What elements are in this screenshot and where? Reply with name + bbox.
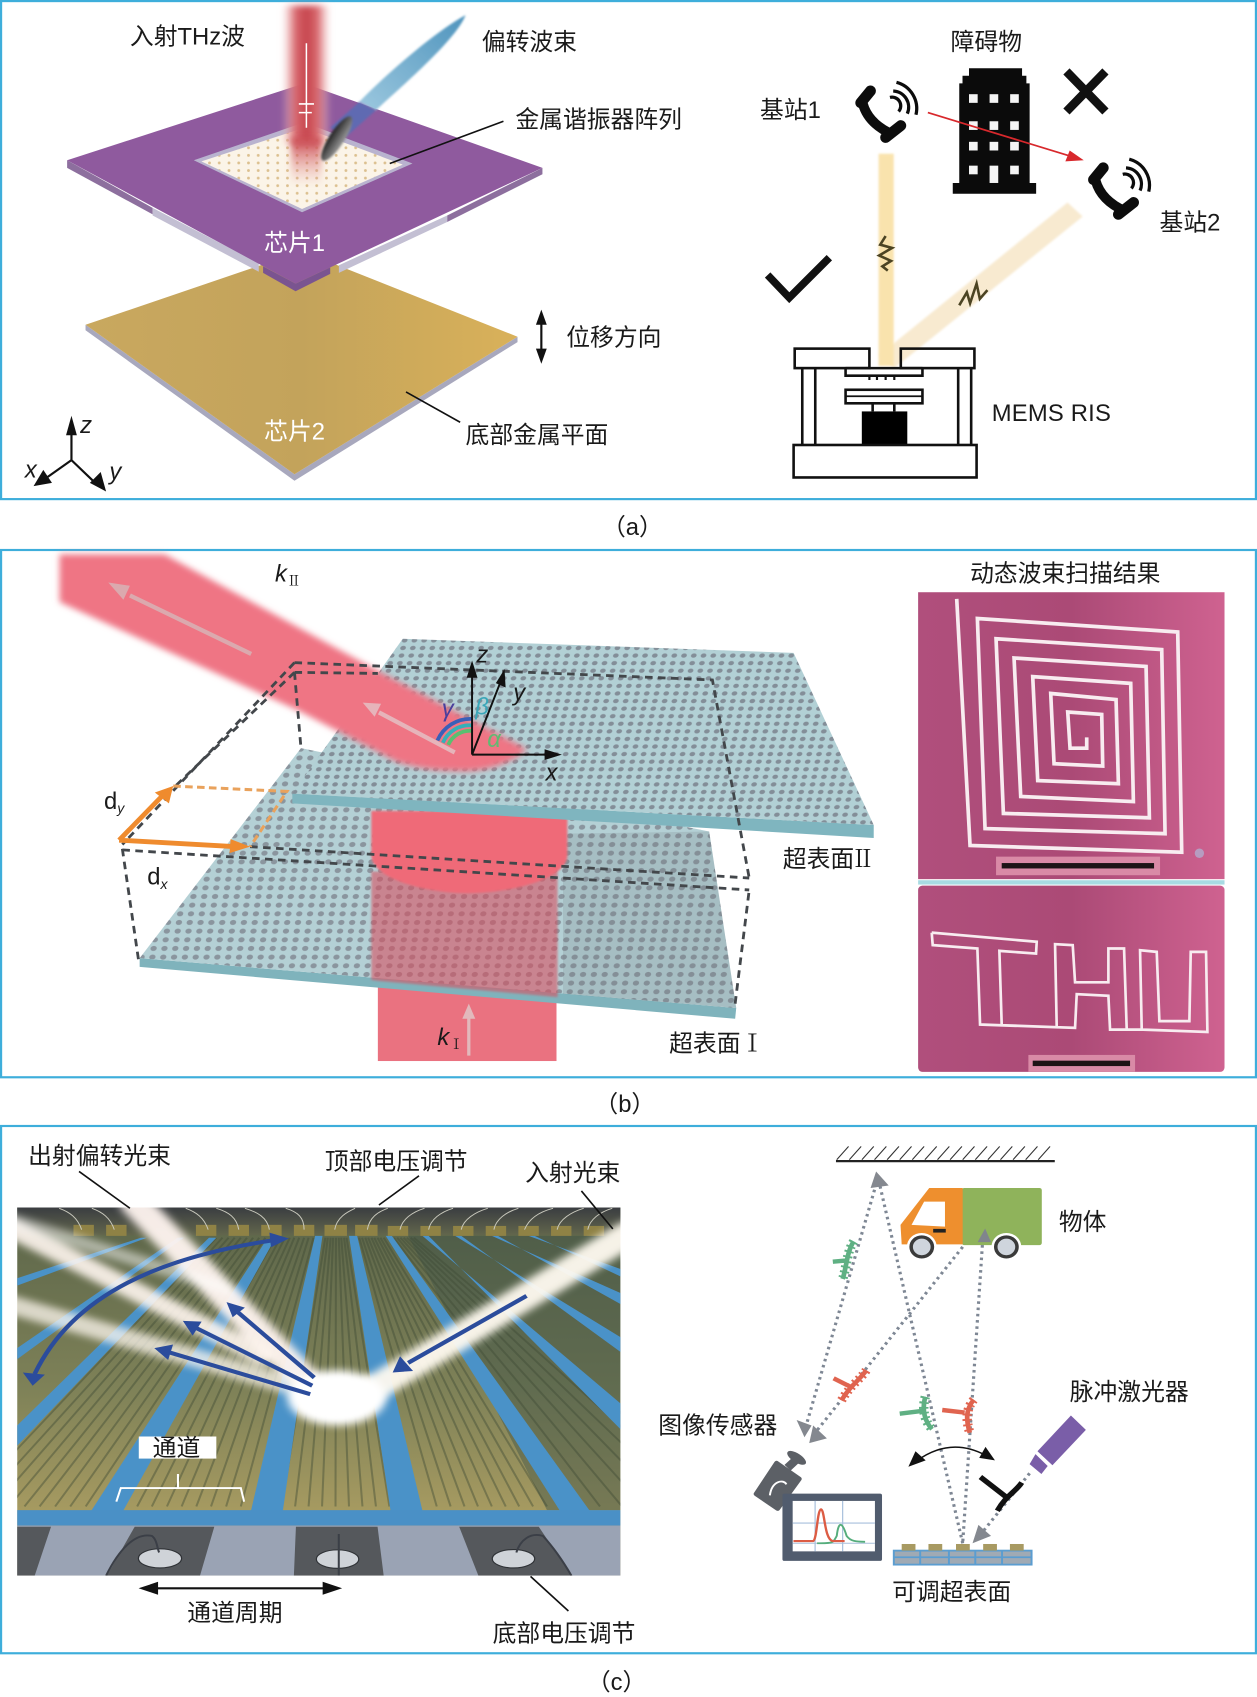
label: k I: Ⅰ <box>449 1037 463 1053</box>
orange displacement arrows dx dy: y <box>116 800 125 816</box>
panel (c): tunable metasurface beam steering <box>0 1126 1256 1653</box>
label: 脉冲激光器: 脉冲激光器 <box>1070 1379 1189 1406</box>
label: 超表面 II: Ⅱ <box>851 847 875 873</box>
incident red THz beam <box>284 5 329 186</box>
label: 基站2: 基站2 <box>1160 210 1220 237</box>
icon: tunable metasurface <box>894 1544 1032 1565</box>
label: 入射光束 with leader: 入射光束 <box>525 1160 620 1187</box>
photo: channelled metasurface with beams <box>0 1203 731 1576</box>
icon: spectrum monitor <box>782 1494 882 1561</box>
label: 出射偏转光束 with leader <box>28 1143 171 1208</box>
chip 2: gold bottom metal plane: 芯片2 <box>264 419 325 446</box>
label: 超表面 I: 超表面 <box>669 1030 740 1057</box>
orange displacement arrows dx dy <box>104 786 287 892</box>
pulse markers <box>833 1241 1022 1511</box>
dashed displacement box <box>122 663 749 1004</box>
angle markers and local axes: y <box>511 679 527 706</box>
grating stripes <box>17 1238 620 1507</box>
panel (b): cascaded metasurfaces <box>1 550 1256 1077</box>
label: 偏转波束: 偏转波束 <box>482 29 577 56</box>
label: 入射光束 with leader <box>525 1160 620 1229</box>
xyz axes: x <box>24 456 38 483</box>
darker right-hand field <box>408 1236 620 1510</box>
arrowheads <box>797 1171 991 1543</box>
chip 1: purple frame with resonator window: 芯片1 <box>264 230 325 257</box>
orange displacement arrows dx dy: d <box>147 864 160 891</box>
label: 顶部电压调节 with leader: 顶部电压调节 <box>325 1148 468 1175</box>
reflected yellow link beams <box>879 154 1083 368</box>
arrow: blocked red link <box>928 113 1084 161</box>
panel (a): terahertz chips and MEMS RIS <box>1 1 1256 499</box>
label: k II: k <box>275 560 287 587</box>
icon: base station 1 phone <box>861 82 917 138</box>
icon: obstacle building <box>953 68 1036 194</box>
angle markers and local axes: γ <box>442 696 456 723</box>
label: 通道: 通道 <box>153 1435 200 1462</box>
scan result: square spiral <box>918 592 1225 879</box>
label: 底部电压调节 with leader: 底部电压调节 <box>493 1620 635 1647</box>
orange displacement arrows dx dy: x <box>159 876 168 892</box>
displacement arrow and label <box>536 310 661 364</box>
channel period arrow and label: 通道周期 <box>187 1600 282 1627</box>
label: 出射偏转光束 with leader: 出射偏转光束 <box>28 1143 171 1170</box>
angle markers and local axes: x <box>545 760 559 787</box>
xyz axes: z <box>79 412 92 439</box>
channel bracket <box>116 1474 244 1502</box>
label: 顶部电压调节 with leader <box>325 1148 468 1205</box>
icon: base station 2 phone <box>1094 159 1149 214</box>
blue rails <box>17 1236 620 1519</box>
label: 底部电压调节 with leader <box>493 1576 635 1647</box>
caption (a): （a） <box>602 514 663 541</box>
label: 金属谐振器阵列 with leader: 金属谐振器阵列 <box>515 107 682 134</box>
label: 金属谐振器阵列 with leader <box>390 107 682 163</box>
steering arrows <box>35 1240 527 1394</box>
channel period arrow and label <box>139 1582 342 1627</box>
chip 1: purple frame with resonator window <box>67 83 542 291</box>
orange displacement arrows dx dy: d <box>104 788 117 815</box>
icon: check mark <box>768 258 829 298</box>
angle markers and local axes: β <box>474 694 489 721</box>
icon: truck object <box>901 1188 1042 1261</box>
label: k II: Ⅱ <box>287 574 301 590</box>
icon: cross <box>1066 71 1105 112</box>
deflected blue beam <box>316 15 466 165</box>
xyz axes <box>24 412 123 492</box>
xyz axes: y <box>107 459 123 486</box>
dotted beam paths <box>807 1184 1030 1543</box>
scan result: THU letters <box>918 886 1225 1072</box>
label: 底部金属平面 with leader: 底部金属平面 <box>466 422 608 449</box>
reflected red beam <box>60 554 527 771</box>
label: 超表面 II: 超表面 <box>783 846 854 873</box>
upper metasurface II <box>292 639 874 838</box>
label: 动态波束扫描结果: 动态波束扫描结果 <box>970 560 1160 587</box>
label: 底部金属平面 with leader <box>406 392 608 449</box>
incident red beam below surface <box>378 974 557 1061</box>
red beam passing through the surfaces <box>371 811 567 997</box>
lower metasurface I <box>140 748 736 1019</box>
displacement arrow and label: 位移方向 <box>566 324 661 351</box>
label: 可调超表面: 可调超表面 <box>892 1579 1011 1606</box>
bottom blue bus and grey floor <box>17 1510 620 1526</box>
label: 入射THz波: 入射THz波 <box>130 23 245 50</box>
label: MEMS RIS: MEMS RIS <box>992 400 1111 427</box>
arrow: scanning arc <box>908 1447 995 1467</box>
icon: image sensor camera <box>756 1448 808 1509</box>
caption (c): （c） <box>587 1669 646 1696</box>
bias bonding pads <box>138 1549 535 1568</box>
chip 2: gold bottom metal plane <box>86 251 518 481</box>
label: 物体: 物体 <box>1059 1209 1107 1236</box>
angle markers and local axes: z <box>475 642 488 669</box>
imaging diagram <box>756 1146 1086 1565</box>
angle markers and local axes <box>437 642 562 787</box>
caption (b): （b） <box>594 1091 655 1118</box>
angle markers and local axes: α <box>487 726 502 753</box>
icon: pulse laser <box>1030 1416 1086 1474</box>
reflecting wall with hatching <box>836 1146 1055 1161</box>
light beams <box>8 1203 629 1392</box>
label: 基站1: 基站1 <box>760 97 821 124</box>
divider between scan images <box>918 880 1225 885</box>
label: k I: k <box>437 1024 449 1051</box>
label: 超表面 I: Ⅰ <box>741 1031 764 1057</box>
top pads <box>73 1225 604 1236</box>
MEMS RIS device <box>794 349 977 477</box>
label: 图像传感器: 图像传感器 <box>658 1412 777 1439</box>
label: 障碍物: 障碍物 <box>951 29 1022 56</box>
